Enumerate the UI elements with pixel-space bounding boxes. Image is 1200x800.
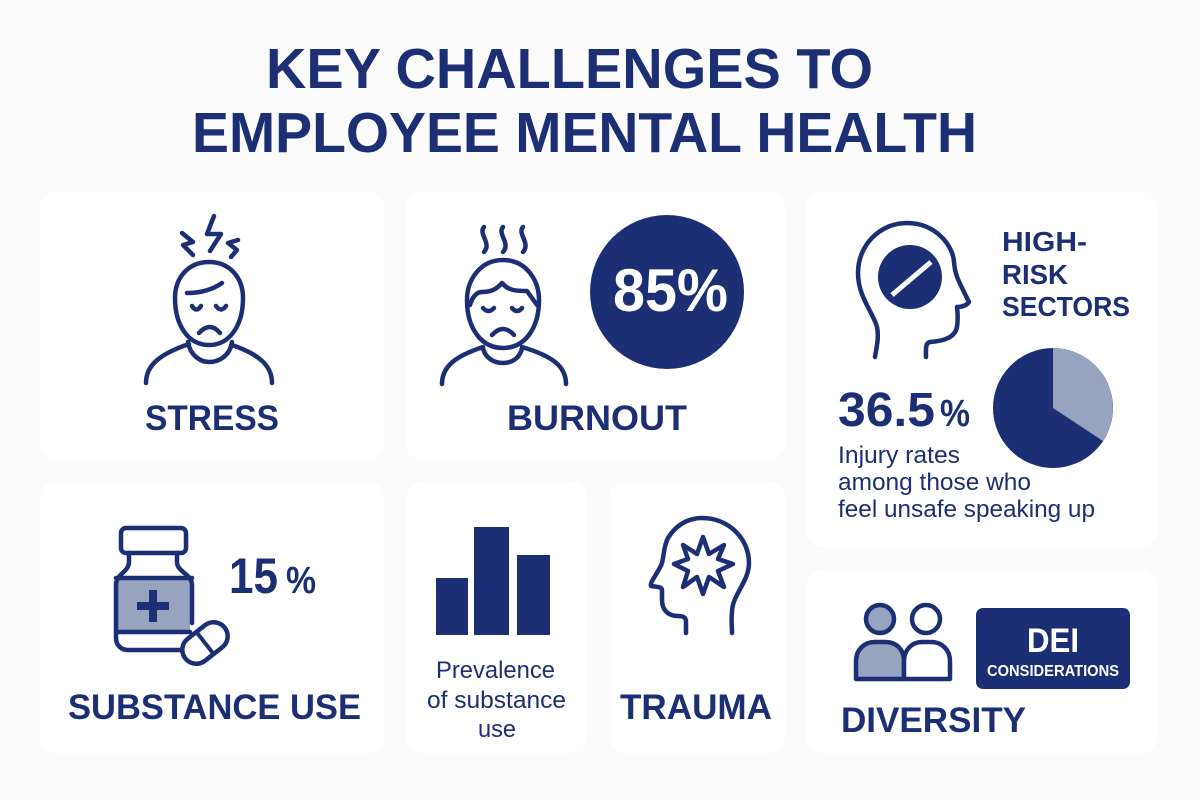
icon: head with blocked circle xyxy=(858,223,969,357)
panel: trauma xyxy=(609,482,785,753)
caption: injury rates xyxy=(838,442,1095,523)
badge: DEI considerations: CONSIDERATIONS xyxy=(987,663,1119,680)
badge: DEI considerations xyxy=(976,608,1130,689)
badge: DEI considerations: DEI xyxy=(1027,622,1079,660)
stat: 15% xyxy=(229,548,316,604)
heading: high-risk sectors: RISK xyxy=(1002,259,1068,290)
caption: injury rates: among those who xyxy=(838,469,1031,496)
icon: head with burst xyxy=(651,518,749,633)
icon: pill bottle xyxy=(116,528,233,669)
caption: prevalence of substance use: Prevalence xyxy=(436,657,555,684)
heading: high-risk sectors xyxy=(1002,226,1130,322)
icon: two people xyxy=(856,605,950,679)
caption: prevalence of substance use: of substance xyxy=(427,687,566,714)
title xyxy=(192,37,977,165)
panel: high-risk sectors xyxy=(806,192,1157,547)
stat: 15%: 15 xyxy=(229,548,278,604)
panel: substance use xyxy=(40,482,384,753)
panel: prevalence xyxy=(406,482,587,753)
label: diversity: DIVERSITY xyxy=(841,701,1026,740)
stat: 36.5%: 36.5 xyxy=(838,384,935,437)
title: KEY CHALLENGES TO xyxy=(266,37,873,101)
heading: high-risk sectors: HIGH- xyxy=(1002,226,1087,257)
pie chart xyxy=(993,348,1113,468)
caption: prevalence of substance use xyxy=(427,657,566,743)
panel: burnout xyxy=(406,192,785,460)
label: burnout: BURNOUT xyxy=(507,399,687,438)
caption: injury rates: feel unsafe speaking up xyxy=(838,496,1095,523)
title: EMPLOYEE MENTAL HEALTH xyxy=(192,101,977,165)
stat: 85% xyxy=(590,215,744,369)
label: stress: STRESS xyxy=(145,399,279,438)
caption: injury rates: Injury rates xyxy=(838,442,960,469)
icon: stressed person xyxy=(146,216,272,383)
label: trauma: TRAUMA xyxy=(620,688,772,727)
bar chart xyxy=(436,527,550,635)
label: substance use: SUBSTANCE USE xyxy=(68,688,361,727)
caption: prevalence of substance use: use xyxy=(478,716,516,743)
panel: diversity xyxy=(806,570,1157,753)
stat: 85%: 85% xyxy=(613,257,728,324)
heading: high-risk sectors: SECTORS xyxy=(1002,291,1130,322)
panel: stress xyxy=(40,192,384,460)
stat: 15%: % xyxy=(286,560,316,602)
stat: 36.5%: % xyxy=(940,393,970,435)
icon: burned-out person xyxy=(442,227,566,384)
